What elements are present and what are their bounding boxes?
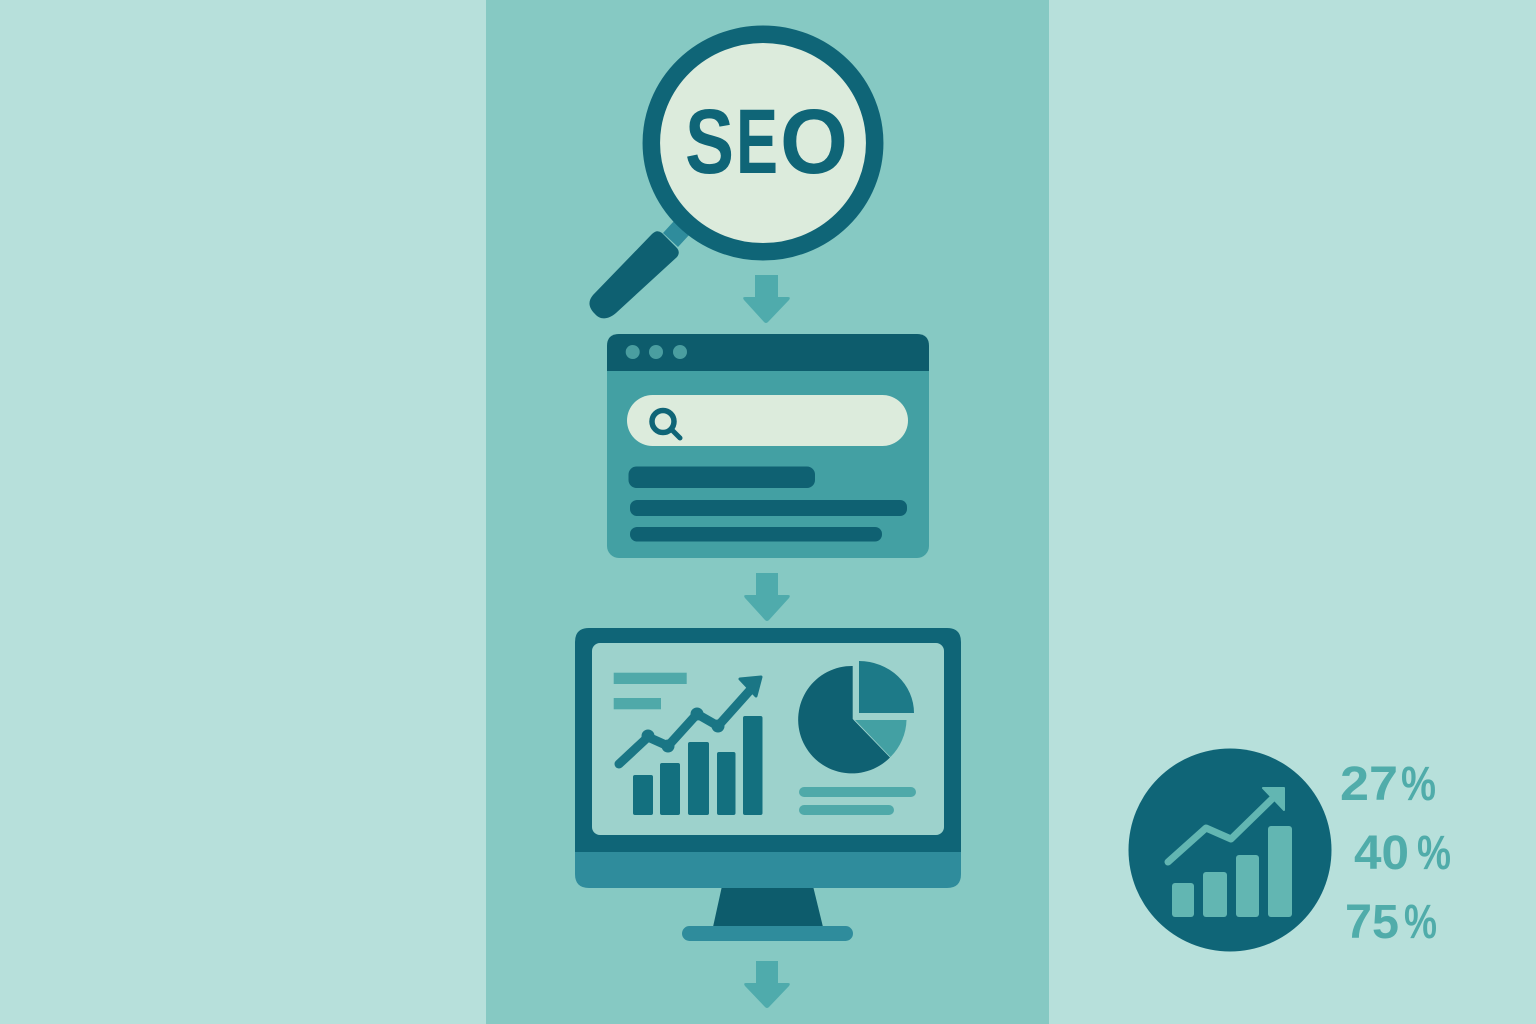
icon: growth chart badge: [1128, 748, 1332, 952]
stat: 27%: 27: [1340, 758, 1398, 811]
pie legend lines: [799, 787, 916, 815]
bar chart: [633, 716, 762, 815]
panel: central column: [486, 0, 1049, 1024]
stat: 75%: %: [1404, 896, 1437, 949]
stat: 40%: 40: [1354, 827, 1409, 880]
arrow: monitor to next step: [744, 961, 790, 1008]
SEO label: S: [685, 91, 734, 193]
badge bars: [1172, 826, 1292, 917]
monitor base: [682, 926, 853, 941]
stat: 27%: %: [1401, 758, 1436, 811]
screen heading bars: [614, 673, 687, 709]
pie slice: small: [855, 720, 906, 757]
panel: browser search window: [607, 334, 929, 558]
magnifier neck: [663, 221, 690, 247]
arrow: magnifier to browser: [743, 275, 790, 323]
SEO label: E: [736, 91, 778, 193]
magnifier lens: [651, 34, 875, 252]
browser body: [607, 334, 929, 558]
pie chart: [798, 661, 914, 773]
badge trend line: [1168, 798, 1273, 862]
search bar: [627, 395, 908, 446]
magnifier handle: [589, 231, 679, 318]
badge arrow head: [1263, 788, 1284, 810]
result line two: [630, 527, 882, 542]
monitor screen: [592, 643, 944, 835]
monitor stand: [713, 886, 823, 927]
stat: 40%: %: [1417, 827, 1451, 880]
browser title bar: [607, 334, 929, 371]
icon: analytics monitor: [575, 628, 961, 941]
badge circle: [1128, 748, 1332, 952]
result heading bar: [628, 466, 815, 488]
monitor chin: [575, 850, 961, 888]
pie slice: large: [798, 666, 890, 773]
icon: SEO magnifying glass: [589, 34, 875, 318]
icon: small magnifier: [652, 410, 680, 438]
result line one: [630, 500, 907, 516]
trend line with arrow: [619, 677, 761, 764]
SEO label: O: [780, 91, 848, 193]
stat: 75%: 75: [1345, 896, 1399, 949]
window dots: [626, 345, 687, 359]
pie slice: detached quarter: [859, 661, 914, 713]
monitor frame: [575, 628, 961, 852]
arrow: browser to monitor: [744, 573, 790, 621]
